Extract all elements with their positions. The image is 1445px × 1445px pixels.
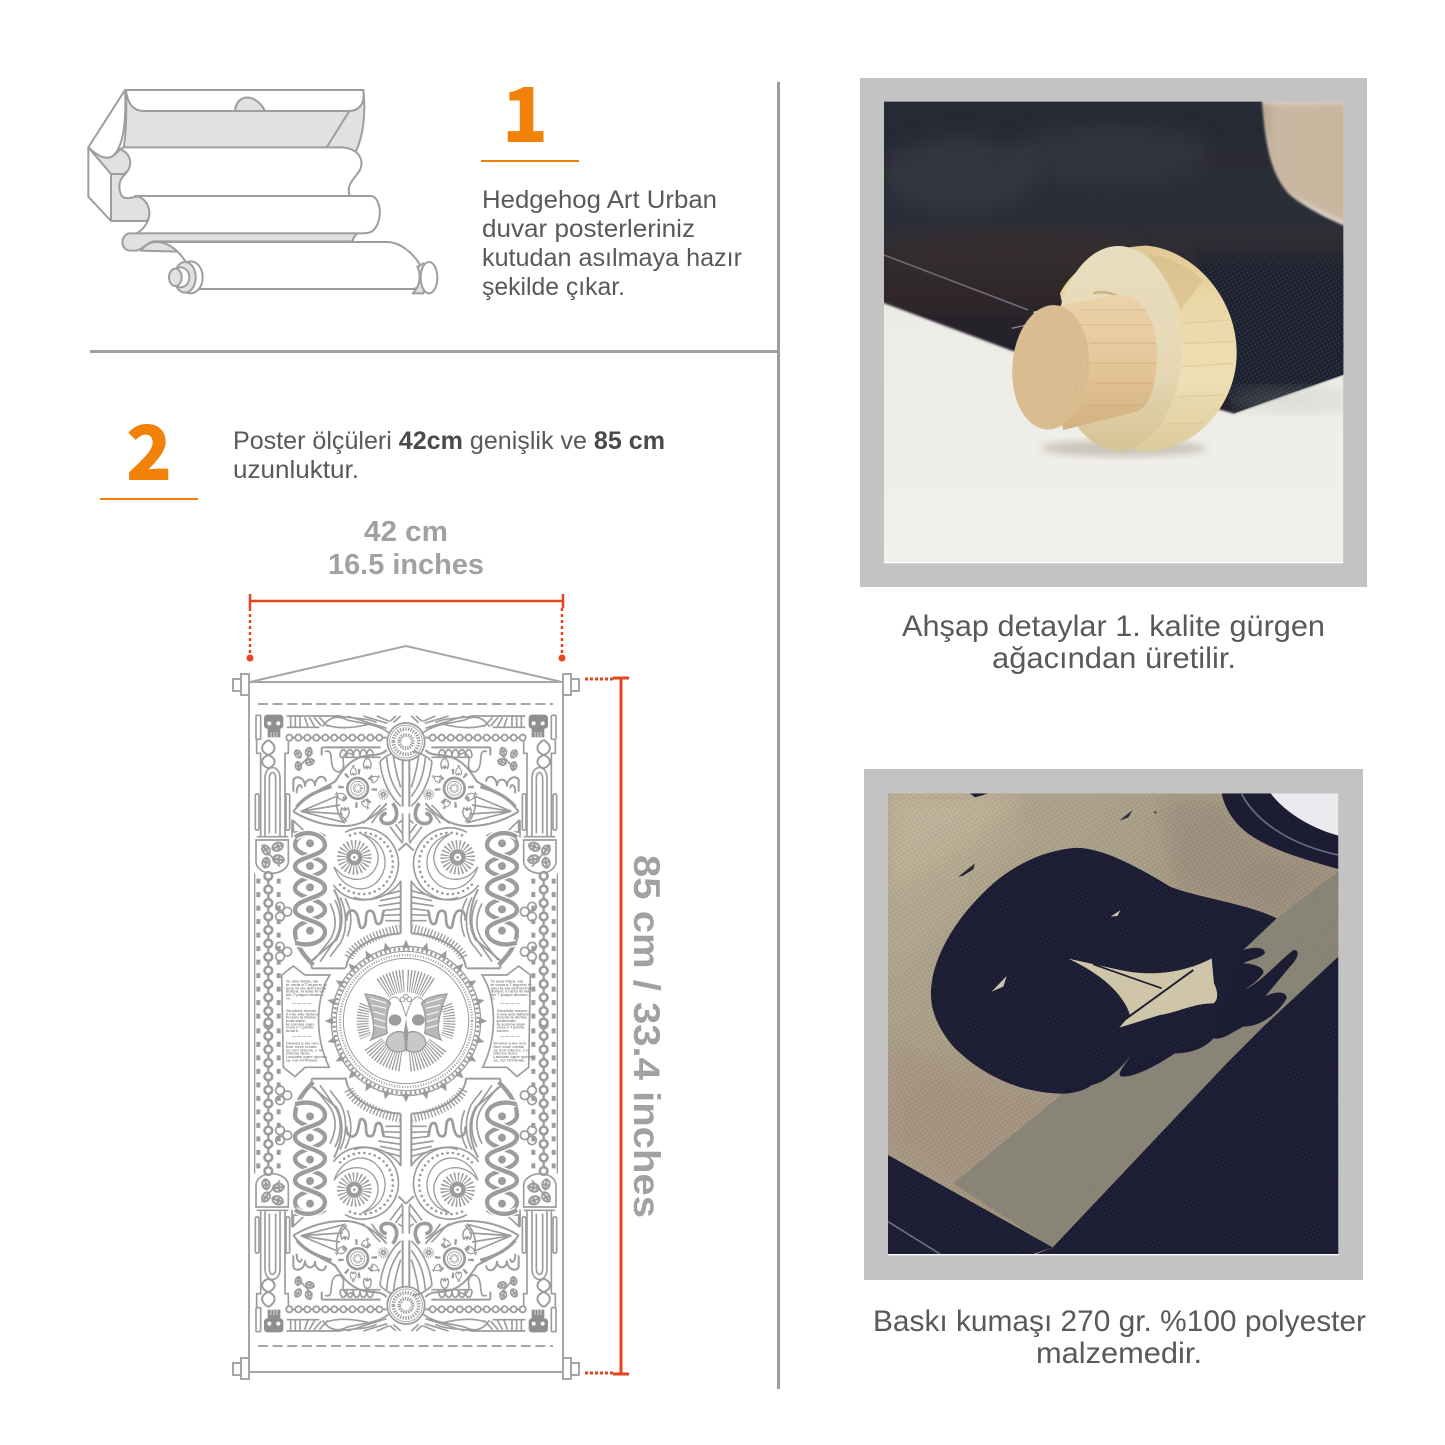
caption: wood bbox=[902, 610, 1325, 675]
poster right text panel: se non etterne, e io bbox=[493, 1047, 530, 1052]
width dimension arrow bbox=[246, 594, 566, 662]
poster left text panel: dolora: io amo fa via bbox=[286, 989, 326, 994]
poster left text panel: te vorta a T'aspera; te bbox=[286, 982, 328, 987]
poster left text panel: fecemi la divina bbox=[286, 1015, 316, 1020]
poster left text panel: Dinanzi a me non bbox=[286, 1041, 319, 1046]
height dimension arrow bbox=[585, 678, 629, 1374]
poster right text panel: dei T'piapol disamo- bbox=[491, 992, 530, 997]
text block: step 1: şekilde çıkar. bbox=[482, 273, 625, 301]
caption: fabric: Baskı kumaşı 270 gr. %100 polyester bbox=[873, 1305, 1366, 1338]
poster right text panel: amore. bbox=[497, 1028, 510, 1033]
poster right text panel: Dinanzi a me non bbox=[493, 1041, 527, 1046]
poster right text panel: amo fa via dell'eterna bbox=[491, 985, 532, 990]
text block: step 1 bbox=[482, 186, 742, 301]
poster right text panel: dolora: io amo fa via bbox=[491, 989, 530, 994]
poster left text panel: enza e 'l primo bbox=[286, 1025, 314, 1030]
photo: printed fabric with sailboat bbox=[888, 793, 1338, 1255]
number 1: 1 bbox=[502, 54, 548, 164]
photo: wooden peg and ring bbox=[877, 97, 1360, 563]
poster left text panel bbox=[286, 979, 329, 1062]
poster left text panel: re. bbox=[286, 995, 291, 1000]
poster right text panel bbox=[491, 979, 536, 1062]
text block: step 2: uzunluktur. bbox=[233, 456, 359, 484]
poster left text panel: Te amo Fatra, via bbox=[286, 979, 319, 984]
poster left text panel: Lasciate ogne speran- bbox=[286, 1054, 329, 1059]
divider: horizontal bbox=[90, 350, 778, 353]
poster central medallion bbox=[325, 940, 487, 1102]
poster right text panel: te vorta a T'aspera; te bbox=[491, 982, 532, 987]
poster left text panel: fuor cose create bbox=[286, 1044, 318, 1049]
poster right text panel: fecemi la divina bbox=[497, 1015, 527, 1020]
poster left text panel: etterno duro. bbox=[286, 1051, 311, 1056]
poster right text panel: fuor cose create bbox=[493, 1044, 525, 1049]
panel: wood detail photo frame bbox=[860, 78, 1367, 587]
orange rule under 1 bbox=[481, 160, 579, 162]
panel: fabric photo frame bbox=[864, 769, 1363, 1280]
caption: fabric: malzemedir. bbox=[1036, 1337, 1202, 1370]
icon: unrolling poster in its box bbox=[88, 90, 437, 293]
poster right text panel: Lasciate ogne speran- bbox=[493, 1054, 536, 1059]
width label: 16.5 inches bbox=[328, 549, 484, 581]
poster right text panel: Te amo Fatra, via bbox=[491, 979, 524, 984]
poster right text panel: la somma sapi- bbox=[497, 1021, 526, 1026]
text block: step 2 bbox=[233, 427, 665, 484]
poster outline drawing bbox=[233, 646, 579, 1379]
poster left text panel: za, voi ch'intrate. bbox=[286, 1057, 318, 1062]
text block: step 2: Poster ölçüleri 42cm genişlik ve 85 cm bbox=[233, 427, 665, 455]
text block: step 1: duvar posterleriniz bbox=[482, 215, 695, 243]
poster right text panel: podestate, bbox=[497, 1018, 517, 1023]
poster left text panel: il mio alto fattore; bbox=[286, 1011, 319, 1016]
poster right text panel: za, voi ch'intrate. bbox=[493, 1057, 526, 1062]
width label: 42 cm bbox=[364, 516, 448, 548]
height label: 85 cm / 33.4 inches bbox=[626, 855, 667, 1218]
poster right text panel: re. bbox=[491, 995, 496, 1000]
caption: wood: ağacından üretilir. bbox=[992, 642, 1236, 675]
text block: step 1: kutudan asılmaya hazır bbox=[482, 244, 742, 272]
divider: vertical bbox=[777, 82, 780, 1389]
poster left text panel: Giustizia mosse bbox=[286, 1008, 317, 1013]
poster left text panel: la somma sapi- bbox=[286, 1021, 315, 1026]
caption: fabric bbox=[873, 1305, 1366, 1370]
poster left text panel: podestate, bbox=[286, 1018, 306, 1023]
poster left text panel: amore. bbox=[286, 1028, 299, 1033]
orange rule under 2 bbox=[100, 498, 198, 500]
poster left text panel: se non etterne, e io bbox=[286, 1047, 323, 1052]
poster frame bbox=[233, 646, 579, 1379]
width label bbox=[328, 516, 484, 581]
poster right text panel: Giustizia mosse bbox=[497, 1008, 528, 1013]
poster left text panel: dei T'piapol disamo- bbox=[286, 992, 325, 997]
poster right text panel: il mio alto fattore; bbox=[497, 1011, 530, 1016]
poster ornament bbox=[255, 715, 557, 1332]
number 2: 2 bbox=[126, 392, 172, 502]
poster right text panel: enza e 'l primo bbox=[497, 1025, 525, 1030]
poster right text panel: etterno duro. bbox=[493, 1051, 518, 1056]
caption: wood: Ahşap detaylar 1. kalite gürgen bbox=[902, 610, 1325, 643]
poster left text panel: amo fa via dell'eterna bbox=[286, 985, 327, 990]
text block: step 1: Hedgehog Art Urban bbox=[482, 186, 717, 214]
